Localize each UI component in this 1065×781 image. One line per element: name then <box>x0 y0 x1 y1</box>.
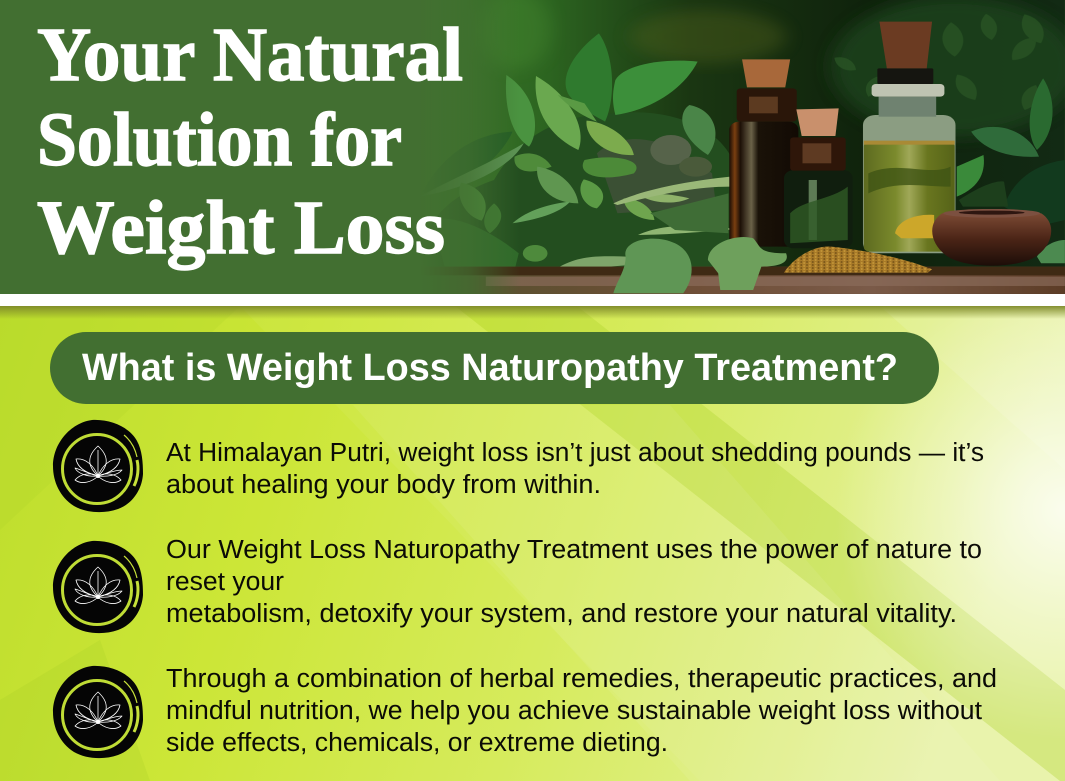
icon: lotus badge 1 <box>53 420 143 512</box>
flower clusters <box>650 135 691 165</box>
section heading pill: What is Weight Loss Naturopathy Treatment? <box>82 347 898 389</box>
main title: Your Natural <box>37 13 463 97</box>
table <box>420 267 1065 294</box>
left colour fade over photo <box>420 0 520 294</box>
small bottle <box>784 170 834 248</box>
icon: lotus badge 3 <box>53 666 143 758</box>
foliage mass <box>456 112 730 266</box>
main title: Solution for <box>37 98 402 182</box>
foreground herbs <box>613 239 692 293</box>
text block: paragraph 3: mindful nutrition, we help you achieve sustainable weight loss without <box>166 697 982 725</box>
text block: paragraph 2: reset your <box>166 568 285 596</box>
text block: paragraph 1 <box>166 439 984 499</box>
seed pile <box>784 246 932 273</box>
section heading pill <box>50 332 939 404</box>
amber bottle <box>729 122 798 247</box>
text block: paragraph 2 <box>166 536 982 628</box>
lime gradient background <box>0 306 1065 781</box>
text block: paragraph 1: At Himalayan Putri, weight loss isn’t just about shedding pounds — it’s <box>166 439 984 467</box>
main title <box>37 13 463 270</box>
lower panel <box>0 306 1065 781</box>
text block: paragraph 2: Our Weight Loss Naturopathy Treatment uses the power of nature to <box>166 536 982 564</box>
text block: paragraph 1: about healing your body from within. <box>166 471 601 499</box>
header banner <box>0 0 1065 294</box>
text block: paragraph 3 <box>166 665 997 757</box>
right leaves <box>957 155 984 197</box>
text block: paragraph 2: metabolism, detoxify your system, and restore your natural vitality. <box>166 600 957 628</box>
icon: lotus badge 2 <box>53 541 143 633</box>
clay bowl <box>932 213 1051 266</box>
text block: paragraph 3: side effects, chemicals, or extreme dieting. <box>166 729 668 757</box>
header green background <box>0 0 1065 294</box>
left leaves <box>476 132 512 168</box>
main title: Weight Loss <box>37 186 445 270</box>
herbal photo illustration <box>420 0 1065 294</box>
glass oil bottle <box>863 115 956 253</box>
text block: paragraph 3: Through a combination of herbal remedies, therapeutic practices, and <box>166 665 997 693</box>
